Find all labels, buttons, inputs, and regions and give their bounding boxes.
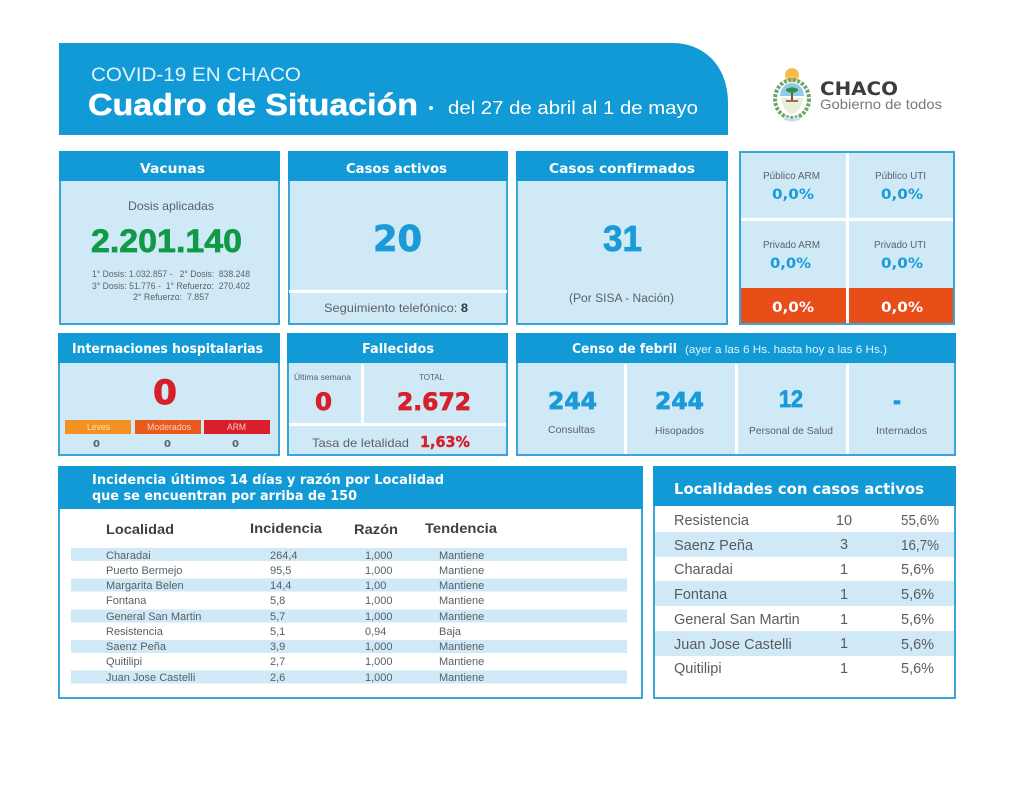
severity: ARM: 0 — [232, 439, 239, 450]
dose breakdown: 3° Dosis: 51.776 - 1° Refuerzo: 270.402 — [92, 281, 250, 292]
source note: (Por SISA - Nación) — [569, 293, 674, 305]
table rows: Mantiene — [439, 656, 484, 668]
cell: público ARM: Público ARM — [763, 171, 820, 182]
orange totals: 0,0% — [772, 300, 814, 316]
active cases value: 20 — [373, 219, 422, 260]
active localities rows: 16,7% — [901, 538, 939, 554]
active localities rows: 1 — [840, 612, 848, 628]
table heading — [92, 473, 444, 504]
logo tagline: Gobierno de todos — [820, 96, 942, 112]
active localities rows: 5,6% — [901, 587, 934, 603]
severity: ARM: ARM — [227, 422, 246, 432]
cell: privado ARM — [763, 240, 820, 272]
severity: leves — [65, 420, 131, 450]
table rows: 1,000 — [365, 550, 393, 562]
table heading: Incidencia últimos 14 días y razón por Localidad — [92, 473, 444, 488]
cell: público UTI: Público UTI — [875, 171, 926, 182]
last week deaths: Última semana — [294, 372, 351, 382]
stat: consultas: 244 — [548, 389, 597, 415]
table rows: Baja — [439, 626, 462, 638]
heading: Vacunas — [140, 162, 205, 177]
table rows: 3,9 — [270, 641, 285, 653]
active localities rows: Saenz Peña — [674, 538, 754, 554]
table rows: 1,000 — [365, 595, 393, 607]
table rows: Juan Jose Castelli — [106, 672, 195, 684]
heading note: (ayer a las 6 Hs. hasta hoy a las 6 Hs.) — [685, 344, 887, 356]
table rows: 2,7 — [270, 656, 285, 668]
total doses: 2.201.140 — [91, 223, 242, 259]
orange totals: 0,0% — [881, 300, 923, 316]
cell: privado ARM: Privado ARM — [763, 240, 820, 251]
table rows: 95,5 — [270, 565, 291, 577]
total deaths — [397, 372, 471, 416]
active localities rows: 5,6% — [901, 612, 934, 628]
dose breakdown: 1° Dosis: 1.032.857 - 2° Dosis: 838.248 — [92, 269, 250, 280]
panel: fallecidos — [287, 333, 508, 455]
table rows: 1,000 — [365, 565, 393, 577]
hospitalised value: 0 — [153, 373, 177, 413]
table rows: Mantiene — [439, 672, 484, 684]
table rows: 14,4 — [270, 580, 291, 592]
stat: internados: Internados — [876, 425, 927, 437]
panel: censo de febril — [516, 333, 956, 455]
column headers: Incidencia — [250, 520, 322, 536]
table rows: Mantiene — [439, 550, 484, 562]
active localities rows: Juan Jose Castelli — [674, 637, 792, 653]
active localities rows: 55,6% — [901, 513, 939, 529]
panel: localidades con casos activos — [653, 466, 956, 698]
column headers: Localidad — [106, 521, 174, 537]
panel: casos activos — [288, 151, 508, 324]
label: Dosis aplicadas — [128, 199, 214, 213]
table rows: 1,000 — [365, 641, 393, 653]
cell: privado UTI: Privado UTI — [874, 240, 926, 251]
active localities rows: 5,6% — [901, 637, 934, 653]
cell: privado UTI — [874, 240, 926, 272]
stat: hisopados: Hisopados — [655, 425, 704, 437]
table rows: 2,6 — [270, 672, 285, 684]
table rows: 5,1 — [270, 626, 285, 638]
active localities rows: Charadai — [674, 562, 733, 578]
orange totals — [772, 300, 923, 316]
table rows: Quitilipi — [106, 656, 142, 668]
active localities rows: Quitilipi — [674, 661, 722, 677]
active localities rows: General San Martin — [674, 612, 800, 628]
table rows: Mantiene — [439, 565, 484, 577]
main title: Cuadro de Situación — [88, 87, 418, 122]
total deaths: TOTAL — [419, 372, 444, 382]
cell: público ARM — [763, 171, 820, 203]
table rows — [71, 548, 627, 684]
table rows: 5,7 — [270, 611, 285, 623]
panel: internaciones hospitalarias — [58, 333, 280, 455]
heading: Fallecidos — [362, 342, 434, 357]
stat: internados: - — [893, 389, 901, 415]
cell: público ARM: 0,0% — [772, 187, 814, 203]
stat: hisopados — [655, 389, 704, 437]
date range: del 27 de abril al 1 de mayo — [448, 97, 698, 118]
phone follow-up: Seguimiento telefónico: 8 — [324, 301, 468, 315]
panel: incidence table — [58, 466, 643, 698]
cell: privado ARM: 0,0% — [770, 256, 811, 272]
dose breakdown: 2° Refuerzo: 7.857 — [133, 292, 209, 303]
stat: personal de salud — [749, 386, 833, 437]
fatality rate: 1,63% — [420, 433, 470, 451]
active localities rows: 5,6% — [901, 562, 934, 578]
panel: casos confirmados — [516, 151, 728, 324]
active localities rows: 3 — [840, 537, 848, 553]
table rows: Fontana — [106, 595, 147, 607]
total deaths: 2.672 — [397, 388, 471, 416]
confirmed cases value: 31 — [603, 218, 642, 259]
table rows: General San Martin — [106, 611, 201, 623]
header banner — [59, 43, 728, 135]
cell: público UTI — [875, 171, 926, 203]
table rows: Mantiene — [439, 595, 484, 607]
severity: leves: 0 — [93, 439, 100, 450]
icon: coat of arms — [775, 68, 809, 122]
table rows: 5,8 — [270, 595, 285, 607]
dose breakdown — [92, 269, 250, 303]
active localities rows: 1 — [840, 562, 848, 578]
active localities rows — [655, 513, 954, 677]
table rows: Resistencia — [106, 626, 164, 638]
stat: internados — [876, 389, 927, 437]
table rows: 0,94 — [365, 626, 386, 638]
header kicker: COVID-19 EN CHACO — [91, 65, 301, 86]
panel: occupancy grid — [740, 152, 954, 324]
stat: hisopados: 244 — [655, 389, 704, 415]
column headers — [106, 520, 497, 537]
table rows: Mantiene — [439, 580, 484, 592]
active localities rows: 1 — [840, 661, 848, 677]
column headers: Razón — [354, 521, 398, 537]
heading: Censo de febril — [572, 342, 677, 357]
title bullet — [429, 106, 433, 110]
heading: Casos activos — [346, 162, 447, 177]
cell: público UTI: 0,0% — [881, 187, 923, 203]
column headers: Tendencia — [425, 520, 497, 536]
table rows: 264,4 — [270, 550, 298, 562]
severity: moderados: Moderados — [147, 422, 191, 432]
panel: vacunas — [59, 151, 280, 324]
stat: consultas — [548, 389, 597, 436]
table rows: Saenz Peña — [106, 641, 167, 653]
table rows: Charadai — [106, 550, 151, 562]
table rows: 1,00 — [365, 580, 386, 592]
active localities rows: Fontana — [674, 587, 728, 603]
table rows: 1,000 — [365, 611, 393, 623]
cell: privado UTI: 0,0% — [881, 256, 923, 272]
severity: moderados: 0 — [164, 439, 171, 450]
severity: leves: Leves — [87, 422, 110, 432]
heading: Internaciones hospitalarias — [72, 342, 263, 357]
active localities rows: Resistencia — [674, 513, 750, 529]
logo wordmark: CHACO — [820, 78, 898, 100]
severity: moderados — [135, 420, 201, 450]
heading: Casos confirmados — [549, 162, 695, 177]
active localities rows: 1 — [840, 587, 848, 603]
last week deaths — [294, 372, 351, 416]
active localities rows: 5,6% — [901, 661, 934, 677]
stat: consultas: Consultas — [548, 424, 595, 436]
table rows: 1,000 — [365, 672, 393, 684]
logo: Chaco government — [775, 68, 942, 122]
table rows: Margarita Belen — [106, 580, 184, 592]
active localities rows: 1 — [840, 636, 848, 652]
table rows: Puerto Bermejo — [106, 565, 182, 577]
fatality rate — [312, 433, 470, 451]
heading: Localidades con casos activos — [674, 480, 924, 498]
severity: ARM — [204, 420, 270, 450]
stat: personal de salud: Personal de Salud — [749, 425, 833, 437]
table rows: Mantiene — [439, 641, 484, 653]
stat: personal de salud: 12 — [779, 386, 803, 413]
fatality rate: Tasa de letalidad — [312, 436, 409, 450]
table heading: que se encuentran por arriba de 150 — [92, 489, 357, 504]
table rows: Mantiene — [439, 611, 484, 623]
last week deaths: 0 — [315, 388, 332, 416]
active localities rows: 10 — [836, 513, 852, 529]
table rows: 1,000 — [365, 656, 393, 668]
